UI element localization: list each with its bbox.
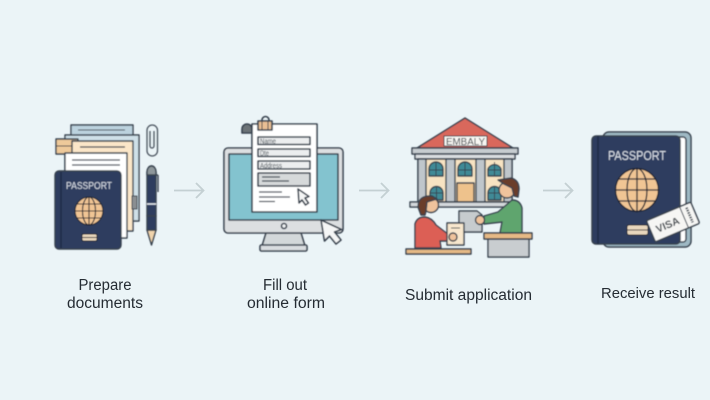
arrow 1 (174, 183, 204, 198)
icon: documents, passport, paperclip and pen (55, 125, 158, 249)
form fields: Dte (260, 148, 269, 158)
caption: fill out online form: online form (247, 295, 325, 312)
person left (415, 196, 449, 248)
visa ticket: VISA (654, 215, 682, 236)
form fields (258, 136, 310, 202)
paperclip (147, 125, 158, 156)
form fields: Address (260, 161, 282, 170)
globe (616, 168, 658, 212)
arrow 3 (543, 183, 572, 198)
person right (484, 178, 522, 233)
form fields: Name (260, 136, 276, 146)
caption: prepare documents (67, 277, 143, 312)
icon: computer with online form (224, 117, 343, 251)
pen (147, 166, 158, 245)
binder clip (258, 117, 272, 130)
documents handed over (459, 211, 482, 232)
windows (429, 162, 501, 200)
caption: submit application: Submit application (405, 287, 532, 304)
icon: passport with visa (592, 132, 700, 247)
icon: embassy building with two people (406, 118, 532, 257)
caption: fill out online form: Fill out (263, 277, 308, 294)
passport label: PASSPORT (66, 181, 112, 192)
caption: prepare documents: Prepare (78, 277, 132, 294)
caption: prepare documents: documents (67, 295, 143, 312)
caption: receive result: Receive result (601, 285, 696, 302)
caption: fill out online form (247, 277, 325, 312)
passport label: PASSPORT (608, 148, 666, 163)
globe (75, 197, 103, 225)
icon: embassy building with two people: EMBALY (446, 137, 485, 148)
arrow 2 (359, 183, 388, 198)
